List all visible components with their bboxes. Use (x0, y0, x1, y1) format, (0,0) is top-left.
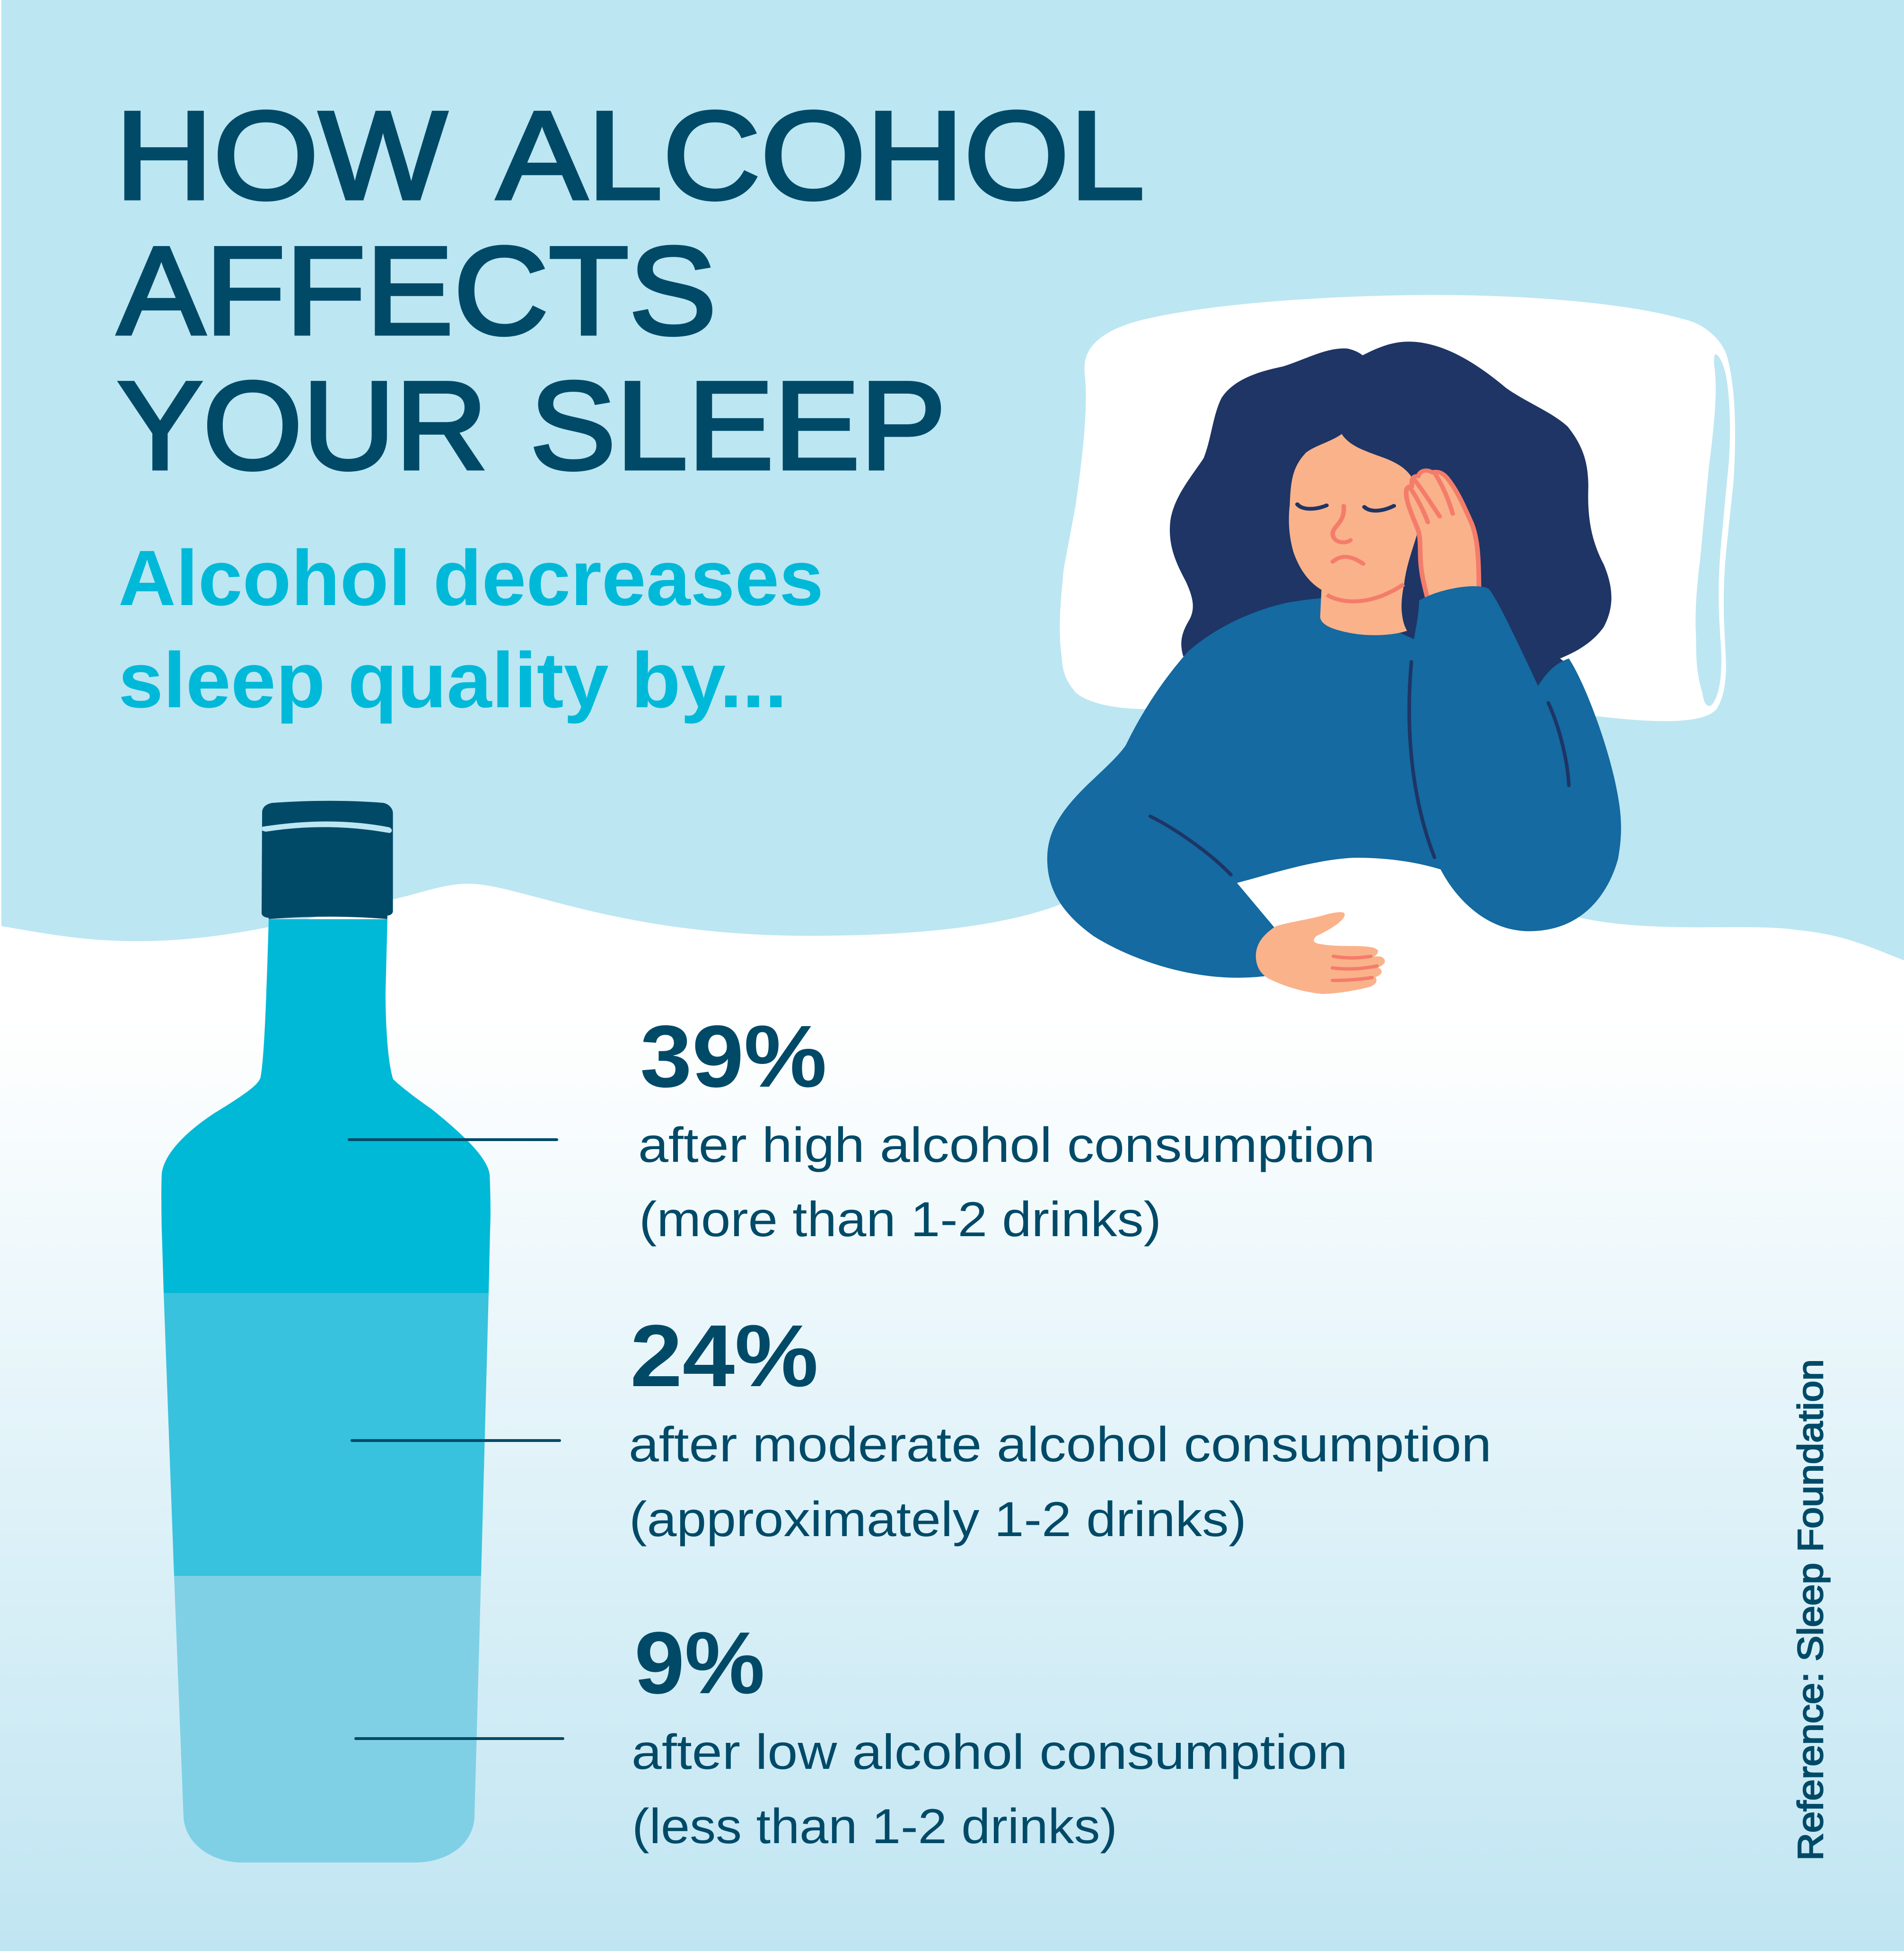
title: YOUR (117, 356, 488, 496)
hair (1170, 342, 1611, 700)
title: ALCOHOL (497, 86, 1145, 226)
chart: bottle with three fill levels (156, 801, 497, 1864)
pillow (1060, 295, 1735, 721)
sweater body and left arm (1047, 598, 1621, 978)
bottle cap (262, 801, 393, 919)
raised sleeve (1414, 586, 1538, 743)
title (115, 86, 1145, 496)
stat: 9% after low consumption: (less than 1-2 drinks) (632, 1799, 1117, 1854)
stat: 24% after moderate consumption (629, 1307, 1492, 1547)
stat: 39% after high consumption: (more than 1-2 drinks) (639, 1192, 1161, 1247)
illustration: woman lying in bed with a headache (1047, 295, 1735, 994)
leader line: 24% (352, 1439, 560, 1442)
bottle fill: 39% high consumption (156, 913, 497, 1293)
leader line: 39% (349, 1138, 557, 1141)
stat: 24% after moderate consumption: 24% (630, 1307, 818, 1405)
stat: 39% after high consumption: after high alcohol consumption (638, 1118, 1375, 1173)
title: SLEEP (530, 356, 946, 496)
eyes (1298, 504, 1394, 510)
background: bed sheet wave with gradient (0, 852, 1904, 1951)
bottle fill: 9% low consumption (174, 1576, 481, 1863)
resting hand (1256, 912, 1385, 994)
leader line: 9% (356, 1737, 563, 1740)
subtitle: Alcohol decreases (118, 535, 824, 622)
title: HOW (115, 86, 448, 226)
nose, mouth and chin lines (1327, 506, 1404, 601)
reference note (rotated): Reference: Sleep Foundation (1790, 1359, 1830, 1861)
stat: 24% after moderate consumption: (approximately 1-2 drinks) (629, 1492, 1246, 1547)
title: AFFECTS (117, 221, 717, 361)
face and neck (1289, 434, 1417, 635)
hand on forehead (1406, 471, 1479, 598)
stat: 24% after moderate consumption: after moderate alcohol consumption (629, 1417, 1492, 1472)
stat: 9% after low consumption: 9% (634, 1614, 765, 1712)
background: upper sky-blue panel (1, 0, 1904, 993)
subtitle (118, 535, 824, 724)
stat: 9% after low consumption: after low alcohol consumption (632, 1725, 1348, 1780)
sleeve crease lines (1150, 662, 1569, 875)
stat: 9% after low consumption (632, 1614, 1348, 1854)
stat: 39% after high consumption: 39% (640, 1008, 827, 1106)
stat: 39% after high consumption (638, 1008, 1375, 1247)
subtitle: sleep quality by... (118, 637, 787, 724)
bottle fill: 24% moderate consumption (156, 1293, 497, 1576)
